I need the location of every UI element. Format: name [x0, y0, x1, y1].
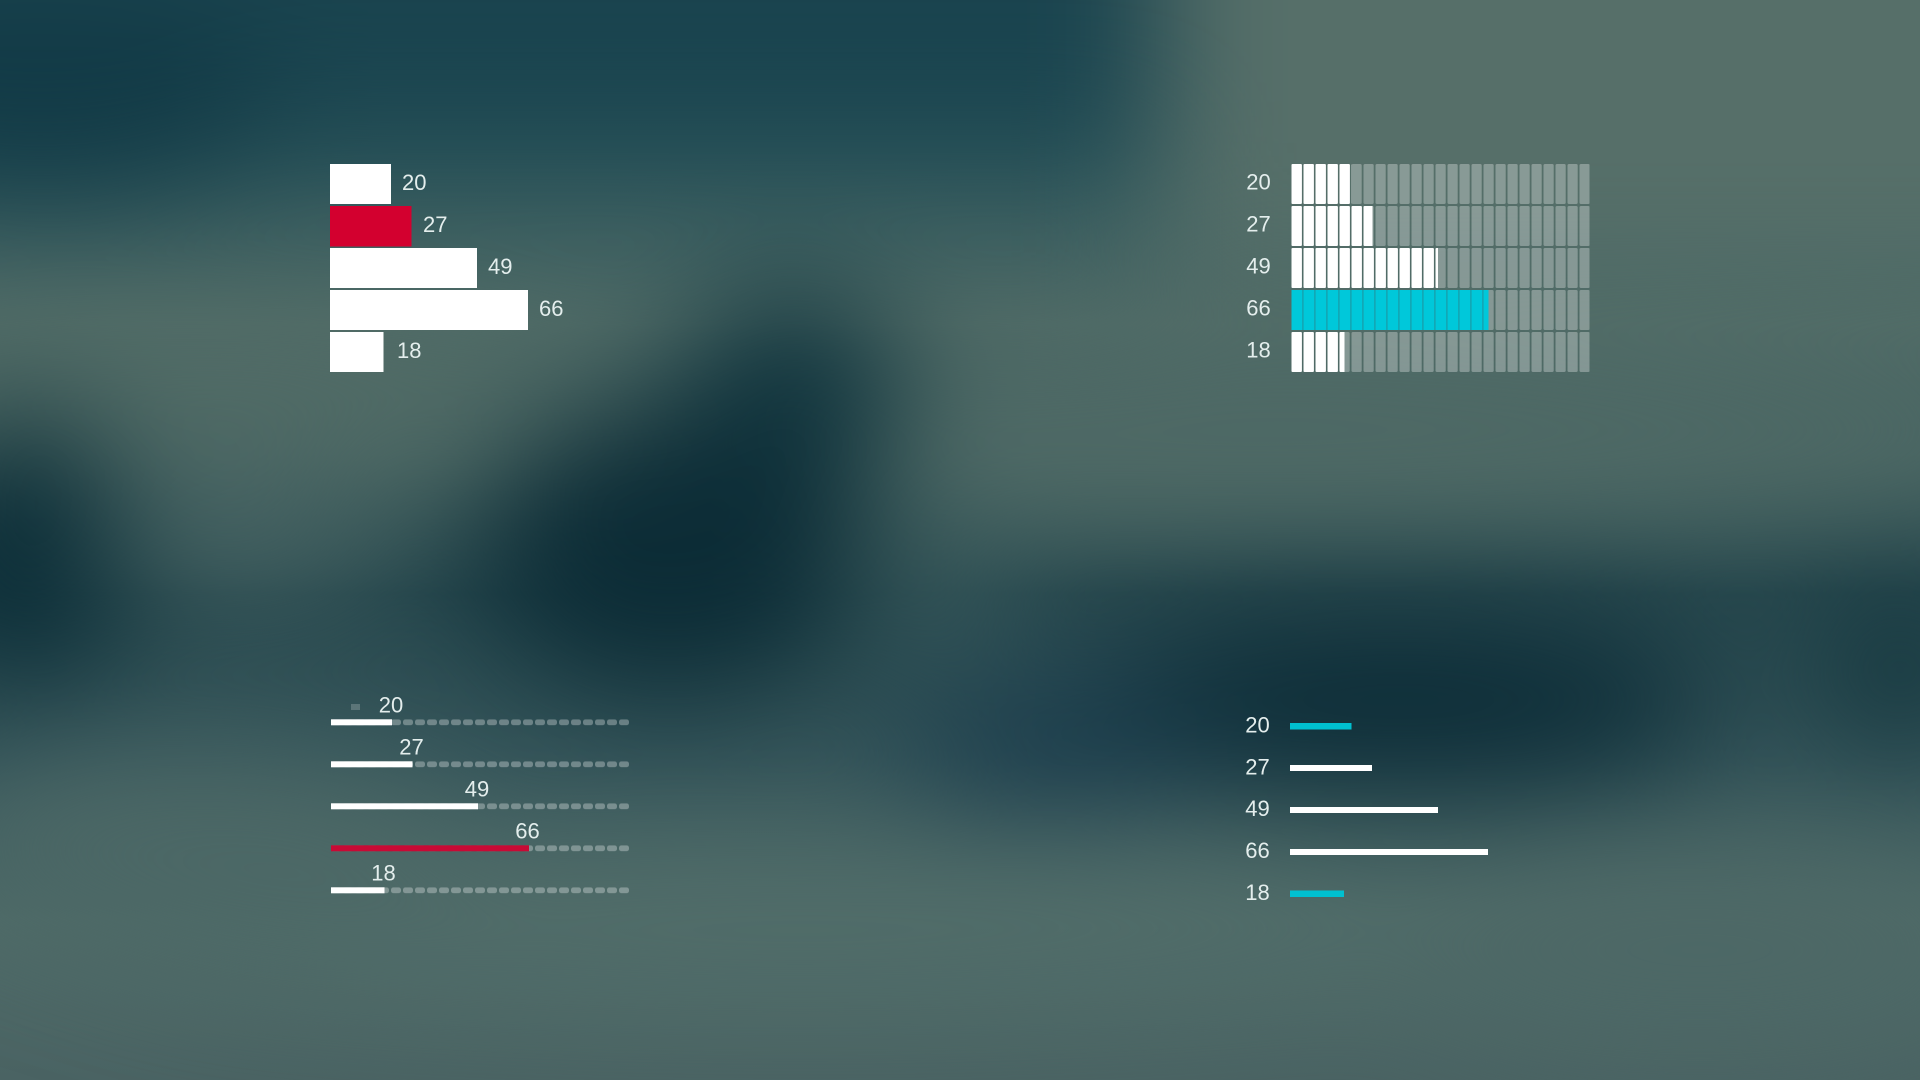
row 20 cyan: 20 [1245, 712, 1270, 738]
bar 18: 18 [397, 338, 421, 363]
row 27: 27 [399, 734, 424, 760]
panel: thin plain bars chart (bottom right) [1245, 712, 1488, 905]
row 20 [331, 692, 630, 725]
row 49: 49 [1245, 796, 1270, 821]
row 66 highlighted red: 66 [515, 818, 540, 844]
row 18: 18 [1246, 338, 1271, 362]
row 27 [1245, 754, 1372, 780]
panel: segmented cell bars chart (top right) [1246, 164, 1590, 372]
row 18 [1246, 332, 1590, 372]
bar 20 [330, 164, 426, 204]
row 49 [331, 776, 630, 809]
bar 49 [330, 248, 512, 288]
panel: thin dotted-track bars chart (bottom left) [331, 692, 630, 893]
row 18 cyan: 18 [1245, 880, 1270, 905]
row 27: 27 [1246, 212, 1271, 236]
bar 18 [330, 332, 421, 372]
row 18: 18 [371, 860, 396, 886]
row 20 [1246, 164, 1590, 204]
bar 20: 20 [402, 170, 426, 195]
row 18 [331, 860, 630, 893]
bar 49: 49 [488, 254, 512, 279]
row 27 [331, 734, 630, 767]
bar 66 [330, 290, 563, 330]
bar 27 highlighted red [330, 206, 447, 246]
row 66 [1245, 838, 1488, 863]
row 18 cyan [1245, 880, 1344, 905]
row 27: 27 [1245, 754, 1270, 780]
row 66 highlighted cyan [1246, 290, 1590, 330]
bar 66: 66 [539, 296, 563, 321]
row 20 cyan [1245, 712, 1352, 738]
row 20: 20 [379, 692, 403, 718]
row 66: 66 [1245, 838, 1270, 863]
row 49 [1245, 796, 1438, 821]
row 66 highlighted red [331, 818, 630, 851]
panel: solid bars chart (top left) [330, 164, 563, 372]
row 49: 49 [465, 776, 489, 802]
row 49 [1246, 248, 1590, 288]
row 20: 20 [1246, 170, 1271, 194]
row 66 highlighted cyan: 66 [1246, 296, 1271, 320]
row 49: 49 [1246, 254, 1271, 278]
bar 27 highlighted red: 27 [423, 212, 447, 237]
row 27 [1246, 206, 1590, 246]
